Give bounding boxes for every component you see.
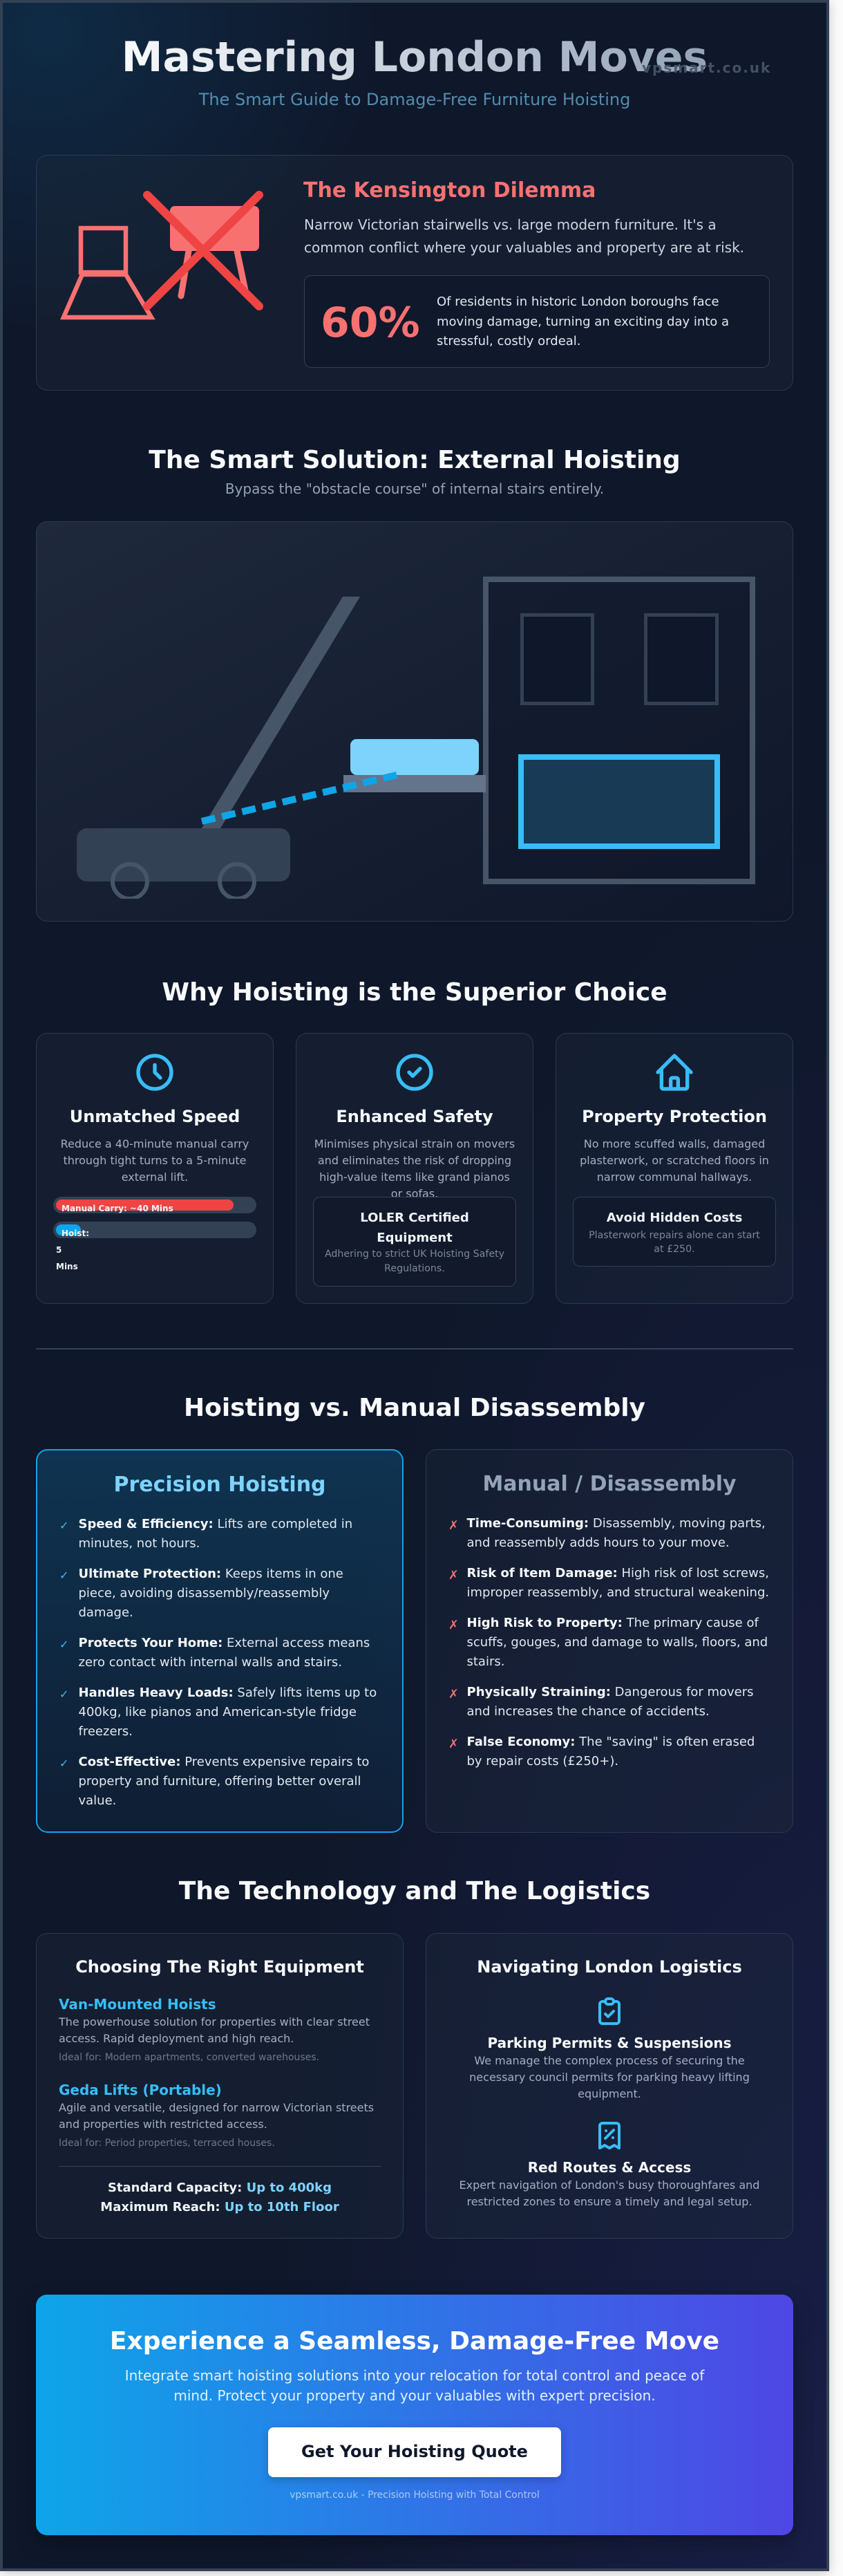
button: [268, 2427, 561, 2477]
watermark: vpsmart.co.uk: [642, 59, 771, 76]
drawback list: stairs.: [467, 1654, 504, 1669]
card text: Minimises physical strain on movers: [314, 1137, 515, 1150]
equipment: Geda lifts: Ideal for: Period properties, terraced houses.: [59, 2138, 275, 2149]
logistics: parking permits: We manage the complex process of securing the: [474, 2054, 745, 2067]
benefit list: value.: [79, 1793, 116, 1808]
card title: Unmatched Speed: [70, 1107, 240, 1126]
benefit list: ✓: [59, 1757, 68, 1770]
text: dilemma description: common conflict where your valuables and property are at risk.: [304, 239, 744, 256]
logistics: parking permits: Parking Permits & Suspensions: [487, 2035, 732, 2051]
panel: call to action: [36, 2295, 793, 2535]
panel title: Choosing The Right Equipment: [75, 1957, 364, 1977]
specifications: Standard Capacity: Up to 400kg: [108, 2181, 332, 2195]
drawback list: improper reassembly, and structural weakening.: [467, 1585, 769, 1600]
drawback list: ✗: [448, 1618, 459, 1632]
icon: clipboard check: [598, 1997, 621, 2025]
benefit list: zero contact with internal walls and stairs.: [79, 1655, 342, 1670]
equipment: Geda lifts: Geda Lifts (Portable): [59, 2082, 222, 2098]
heading: dilemma: The Kensington Dilemma: [303, 178, 596, 203]
drawback list: ✗: [448, 1569, 459, 1583]
building: [486, 579, 752, 881]
callout: hidden costs: [574, 1197, 775, 1267]
equipment: van-mounted hoists: access. Rapid deployment and high reach.: [59, 2032, 294, 2045]
equipment: Geda lifts: [59, 2082, 374, 2149]
bar: hoist time: [53, 1222, 256, 1271]
benefit list: piece, avoiding disassembly/reassembly: [79, 1586, 330, 1600]
icon: receipt: [598, 2122, 621, 2150]
lift platform with sofa: [343, 739, 486, 792]
benefit list: 400kg, like pianos and American-style fridge: [79, 1705, 357, 1719]
CTA text: Integrate smart hoisting solutions into your relocation for total control and peace of: [125, 2367, 705, 2384]
logistics: parking permits: equipment.: [578, 2087, 641, 2100]
benefit list: minutes, not hours.: [79, 1536, 200, 1551]
card text: No more scuffed walls, damaged: [584, 1137, 765, 1150]
benefit list: ✓: [59, 1688, 68, 1701]
drawback list: ✗: [448, 1737, 459, 1751]
title: Mastering London Moves: [122, 33, 708, 82]
callout: 60 percent statistic: Of residents in historic London boroughs face: [437, 295, 719, 309]
callout: hidden costs: Avoid Hidden Costs: [607, 1211, 742, 1225]
drawback list: False Economy: The "saving" is often erased: [467, 1735, 755, 1749]
heading: smart solution: The Smart Solution: External Hoisting: [149, 446, 681, 474]
benefit list: Cost-Effective: Prevents expensive repairs to: [79, 1755, 369, 1769]
logistics: red routes: Red Routes & Access: [528, 2159, 691, 2176]
button: Get Your Hoisting Quote: [301, 2442, 528, 2461]
logistics: red routes: [460, 2159, 759, 2208]
callout: LOLER certification: LOLER Certified: [360, 1211, 469, 1225]
panel: hoisting diagram: [36, 521, 793, 921]
benefit list: ✓: [59, 1638, 68, 1651]
drawback list: Risk of Item Damage: High risk of lost screws,: [467, 1566, 769, 1580]
heading: technology and logistics: The Technology and The Logistics: [179, 1877, 650, 1905]
bar: manual carry time: [53, 1197, 256, 1213]
callout: 60 percent statistic: moving damage, turning an exciting day into a: [437, 315, 729, 329]
card title: Enhanced Safety: [336, 1107, 493, 1126]
benefit list: freezers.: [79, 1724, 133, 1739]
bar: hoist time: 5: [56, 1245, 61, 1255]
callout: hidden costs: Plasterwork repairs alone can start: [589, 1230, 760, 1241]
card title: Property Protection: [582, 1107, 767, 1126]
logistics: parking permits: [469, 2035, 750, 2100]
drawback list: [448, 1516, 769, 1768]
icon: shield check circle: [396, 1054, 433, 1091]
panel: property protection: [556, 1033, 793, 1304]
card text: external lift.: [122, 1170, 188, 1184]
callout: LOLER certification: [314, 1197, 515, 1286]
benefit list: ✓: [59, 1569, 68, 1582]
drawback list: High Risk to Property: The primary cause of: [467, 1616, 759, 1630]
equipment: van-mounted hoists: The powerhouse solution for properties with clear street: [58, 2015, 370, 2028]
drawback list: and reassembly adds hours to your move.: [467, 1536, 730, 1550]
callout: 60 percent statistic: 60%: [321, 299, 420, 347]
panel title: Precision Hoisting: [113, 1473, 326, 1497]
footer note: vpsmart.co.uk - Precision Hoisting with Total Control: [290, 2490, 540, 2501]
logistics: parking permits: necessary council permits for parking heavy lifting: [469, 2071, 750, 2084]
benefit list: Speed & Efficiency: Lifts are completed in: [79, 1517, 352, 1531]
icon: house: [656, 1054, 693, 1091]
logistics: red routes: restricted zones to ensure a timely and legal setup.: [466, 2195, 752, 2208]
drawback list: ✗: [448, 1519, 459, 1533]
panel title: Navigating London Logistics: [477, 1957, 742, 1977]
benefit list: Ultimate Protection: Keeps items in one: [79, 1567, 343, 1581]
CTA text: mind. Protect your property and your valuables with expert precision.: [173, 2387, 656, 2404]
panel: the Kensington dilemma: [36, 155, 793, 390]
panel: unmatched speed: [36, 1033, 274, 1304]
equipment: van-mounted hoists: Van-Mounted Hoists: [59, 1996, 216, 2013]
heading: hoisting vs manual: Hoisting vs. Manual Disassembly: [184, 1394, 645, 1422]
benefit list: Protects Your Home: External access means: [79, 1636, 370, 1650]
panel: choosing equipment: [36, 1933, 404, 2239]
card text: and eliminates the risk of dropping: [318, 1154, 511, 1167]
equipment: Geda lifts: and properties with restricted access.: [59, 2118, 267, 2131]
callout: LOLER certification: Equipment: [377, 1231, 453, 1245]
bar: hoist time: Mins: [56, 1262, 78, 1271]
equipment: van-mounted hoists: [58, 1996, 370, 2063]
benefit list: [59, 1517, 377, 1808]
benefit list: damage.: [79, 1605, 133, 1620]
CTA heading: Experience a Seamless, Damage-Free Move: [110, 2327, 719, 2355]
drawback list: ✗: [448, 1688, 459, 1701]
bar: manual carry time: Manual Carry: ~40 Mins: [61, 1204, 173, 1213]
drawback list: Time-Consuming: Disassembly, moving parts,: [467, 1516, 766, 1531]
panel: navigating logistics: [426, 1933, 793, 2239]
equipment: Geda lifts: Agile and versatile, designed for narrow Victorian streets: [59, 2101, 374, 2114]
hoist vehicle and arm: [77, 597, 360, 899]
benefit list: property and furniture, offering better overall: [79, 1774, 361, 1789]
panel title: Manual / Disassembly: [482, 1472, 737, 1496]
drawback list: Physically Straining: Dangerous for movers: [467, 1685, 754, 1699]
panel: precision hoisting: [37, 1450, 403, 1832]
card text: Reduce a 40-minute manual carry: [61, 1137, 249, 1150]
equipment: van-mounted hoists: Ideal for: Modern apartments, converted warehouses.: [59, 2052, 319, 2063]
subtitle: The Smart Guide to Damage-Free Furniture Hoisting: [198, 90, 630, 109]
drawback list: by repair costs (£250+).: [467, 1754, 618, 1768]
callout: hidden costs: at £250.: [654, 1244, 695, 1255]
benefit list: Handles Heavy Loads: Safely lifts items up to: [79, 1686, 377, 1700]
specifications: [100, 2181, 339, 2214]
text: solution subheading: Bypass the "obstacle course" of internal stairs entirely.: [225, 480, 604, 497]
card text: through tight turns to a 5-minute: [63, 1154, 247, 1167]
dashed hoist cable: [202, 775, 397, 821]
callout: LOLER certification: Adhering to strict UK Hoisting Safety: [325, 1249, 504, 1260]
icon: furniture blocked by cross: [64, 195, 259, 317]
card text: high-value items like grand pianos: [319, 1170, 510, 1184]
panel: enhanced safety: [296, 1033, 533, 1304]
logistics: red routes: Expert navigation of London's busy thoroughfares and: [460, 2178, 759, 2192]
card text: or sofas.: [391, 1187, 438, 1200]
callout: 60 percent statistic: stressful, costly ordeal.: [437, 334, 581, 348]
callout: LOLER certification: Regulations.: [384, 1263, 445, 1274]
specifications: Maximum Reach: Up to 10th Floor: [100, 2200, 339, 2214]
drawback list: and increases the chance of accidents.: [467, 1704, 710, 1719]
callout: 60 percent statistic: [304, 275, 770, 368]
icon: clock: [136, 1054, 173, 1091]
panel: manual disassembly: [426, 1449, 793, 1832]
card text: narrow communal hallways.: [597, 1170, 752, 1184]
text: dilemma description: Narrow Victorian stairwells vs. large modern furniture. It's a: [304, 216, 717, 233]
bar: hoist time: Hoist:: [61, 1229, 89, 1238]
drawback list: scuffs, gouges, and damage to walls, floors, and: [467, 1635, 768, 1650]
card text: plasterwork, or scratched floors in: [580, 1154, 769, 1167]
benefit list: ✓: [59, 1519, 68, 1532]
heading: superior choice: Why Hoisting is the Superior Choice: [162, 978, 667, 1007]
